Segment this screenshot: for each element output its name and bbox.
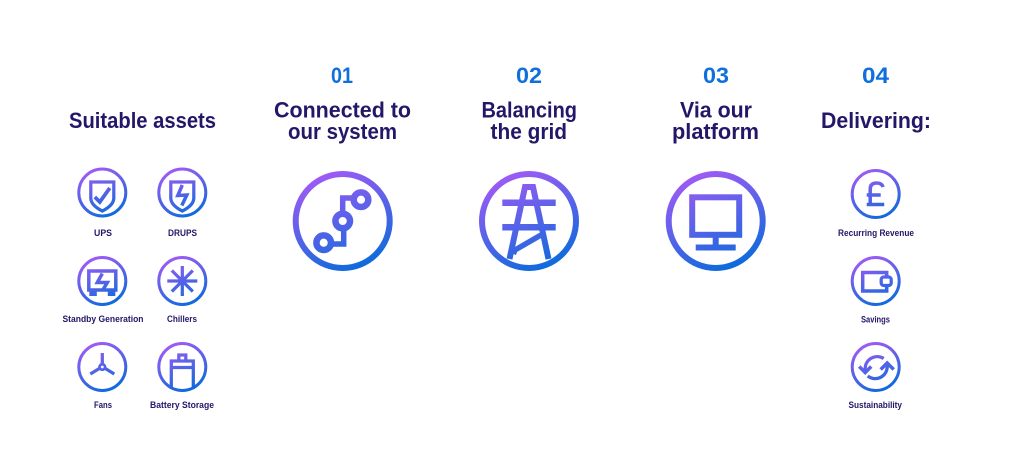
label: fans: Fans — [94, 400, 112, 410]
label: recurring revenue: Recurring Revenue — [838, 228, 914, 238]
icon: chillers snowflake — [159, 258, 206, 304]
number: 04: 04 — [862, 63, 890, 88]
icon: standby generation — [79, 258, 126, 304]
icon: pound sign — [852, 170, 899, 218]
panel: step 04 delivering — [821, 63, 931, 410]
heading: balancing the grid: Balancing — [482, 98, 577, 122]
label: DRUPS: DRUPS — [168, 228, 197, 238]
heading: balancing the grid — [482, 98, 577, 144]
label: chillers: Chillers — [167, 314, 197, 324]
number: 03: 03 — [703, 63, 729, 88]
label: battery storage: Battery Storage — [150, 400, 214, 410]
heading: connected to our system: Connected to — [274, 98, 411, 122]
icon: wallet — [852, 258, 899, 304]
icon: fan — [79, 344, 126, 390]
panel: suitable assets — [62, 108, 216, 410]
heading: suitable assets: Suitable assets — [69, 108, 216, 133]
heading: balancing the grid: the grid — [490, 119, 567, 144]
label: standby generation: Standby Generation — [62, 314, 144, 324]
icon: battery — [159, 344, 206, 390]
heading: via our platform — [672, 98, 759, 144]
number: 02: 02 — [516, 63, 542, 88]
heading: delivering: Delivering: — [821, 108, 931, 133]
label: sustainability: Sustainability — [848, 400, 902, 410]
heading: via our platform: Via our — [680, 98, 752, 122]
heading: connected to our system: our system — [288, 119, 397, 144]
icon: UPS shield with tick — [79, 169, 126, 216]
icon: connected nodes — [296, 174, 390, 268]
panel: step 01 — [274, 63, 411, 268]
number: 01: 01 — [331, 63, 353, 88]
panel: step 02 — [482, 63, 577, 268]
icon: monitor — [669, 174, 763, 268]
heading: via our platform: platform — [672, 119, 759, 144]
heading: connected to our system — [274, 98, 411, 144]
label: savings: Savings — [861, 314, 890, 324]
panel: step 03 — [669, 63, 763, 268]
icon: electricity pylon — [482, 174, 576, 268]
icon: DRUPS shield with bolt — [159, 169, 206, 216]
label: UPS: UPS — [94, 228, 112, 238]
icon: sustainability arrows — [852, 344, 899, 390]
